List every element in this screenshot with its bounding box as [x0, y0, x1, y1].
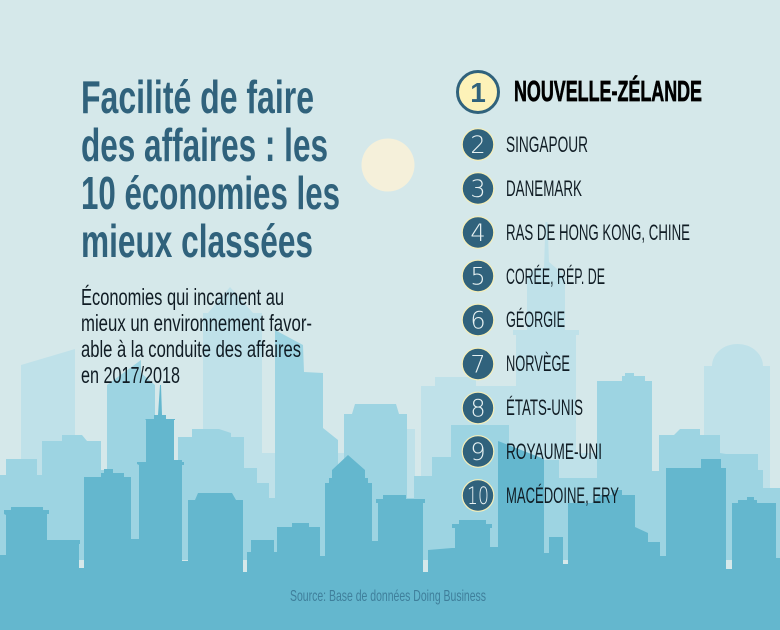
skyline: near dark layer: [0, 385, 780, 630]
rank 3: Danemark: [462, 173, 582, 204]
rank 3: Danemark: DANEMARK: [506, 176, 582, 201]
subtitle text: Économies qui incarnent au: [81, 284, 284, 310]
icon: pale sun: [362, 138, 414, 192]
subtitle text: mieux un environnement favor-: [81, 310, 312, 336]
subtitle text: en 2017/2018: [81, 362, 180, 388]
rank 5: Corée, Rép. de: CORÉE, RÉP. DE: [506, 264, 605, 289]
rank 4: RAS de Hong Kong, Chine: 4: [470, 219, 486, 247]
rank 10: Macédoine, ERY: [462, 480, 619, 511]
rank 2: Singapour: SINGAPOUR: [506, 132, 588, 157]
rank 7: Norvège: NORVÈGE: [506, 351, 570, 376]
subtitle text: [81, 284, 312, 388]
rank 2: Singapour: [462, 129, 588, 160]
skyline: middle layer: [0, 330, 780, 560]
title: des affaires : les: [81, 119, 328, 171]
rank 8: États-Unis: 8: [470, 394, 486, 422]
rank 1: Nouvelle-Zélande: [458, 72, 702, 112]
rank 10: Macédoine, ERY: 10: [467, 482, 489, 510]
rank 5: Corée, Rép. de: 5: [470, 262, 486, 290]
rank 1: Nouvelle-Zélande: 1: [470, 77, 486, 108]
rank 8: États-Unis: [462, 392, 583, 424]
title: [81, 71, 340, 267]
rank 7: Norvège: [462, 348, 570, 380]
rank 7: Norvège: 7: [470, 350, 486, 378]
rank 2: Singapour: 2: [470, 131, 486, 159]
rank 6: Géorgie: 6: [470, 306, 486, 334]
rank 6: Géorgie: [462, 304, 565, 336]
rank 5: Corée, Rép. de: [462, 260, 605, 292]
title: Facilité de faire: [81, 71, 314, 123]
rank 9: Royaume-Uni: [462, 436, 602, 467]
rank 9: Royaume-Uni: ROYAUME-UNI: [506, 439, 602, 464]
subtitle text: able à la conduite des affaires: [81, 336, 301, 362]
rank 6: Géorgie: GÉORGIE: [506, 307, 565, 332]
title: mieux classées: [81, 215, 313, 267]
rank 4: RAS de Hong Kong, Chine: [462, 217, 690, 248]
rank 10: Macédoine, ERY: MACÉDOINE, ERY: [506, 483, 619, 508]
skyline: far light layer: [21, 222, 770, 553]
rank 3: Danemark: 3: [470, 175, 486, 203]
rank 9: Royaume-Uni: 9: [470, 438, 486, 466]
source note: Source: Base de données Doing Business: [290, 588, 486, 605]
title: 10 économies les: [81, 167, 340, 219]
rank 8: États-Unis: ÉTATS-UNIS: [506, 395, 583, 420]
